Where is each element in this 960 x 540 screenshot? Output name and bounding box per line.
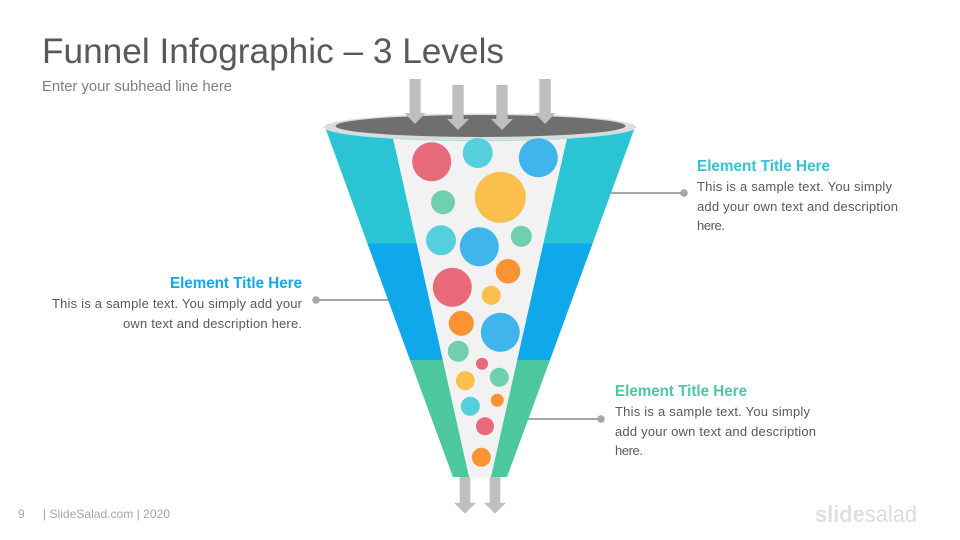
connector: bottom right bbox=[527, 415, 605, 423]
text block: top right bbox=[697, 158, 898, 233]
description: This is a sample text. You simply bbox=[697, 179, 892, 194]
funnel opening bbox=[336, 115, 626, 137]
text block: bottom right bbox=[615, 383, 816, 458]
element title: Element Title Here bbox=[615, 383, 747, 400]
description: This is a sample text. You simply bbox=[615, 404, 810, 419]
logo: slidesalad bbox=[815, 501, 917, 527]
funnel band: bottom green bbox=[410, 360, 550, 477]
arrow left bbox=[454, 477, 476, 514]
element title: Element Title Here bbox=[697, 158, 830, 175]
funnel bbox=[324, 114, 636, 477]
page number: 9 bbox=[18, 507, 25, 521]
description: This is a sample text. You simply add your bbox=[52, 296, 303, 311]
title: Funnel Infographic – 3 Levels bbox=[42, 32, 504, 71]
funnel band: middle blue bbox=[367, 244, 593, 360]
funnel rim edge bbox=[324, 114, 636, 141]
description: own text and description here. bbox=[123, 316, 302, 331]
funnel inner channel bbox=[390, 127, 570, 477]
funnel rim bbox=[324, 114, 636, 140]
arrow 1 bbox=[404, 79, 426, 124]
funnel band: top teal bbox=[325, 127, 635, 244]
output arrows bbox=[454, 477, 506, 514]
description bbox=[697, 179, 898, 233]
input arrows bbox=[404, 79, 556, 130]
arrow 4 bbox=[534, 79, 556, 124]
description bbox=[615, 404, 816, 458]
description: add your own text and description bbox=[615, 424, 816, 439]
bubbles bbox=[412, 138, 558, 467]
element title: Element Title Here bbox=[170, 275, 302, 292]
description: add your own text and description bbox=[697, 199, 898, 214]
arrow 3 bbox=[491, 85, 513, 130]
connector: middle left bbox=[312, 296, 389, 304]
description: here. bbox=[697, 218, 725, 233]
subhead: Enter your subhead line here bbox=[42, 79, 232, 95]
footer text: | SlideSalad.com | 2020 bbox=[43, 507, 170, 521]
arrow 2 bbox=[447, 85, 469, 130]
description bbox=[52, 296, 303, 331]
arrow right bbox=[484, 477, 506, 514]
connector: top right bbox=[611, 189, 688, 197]
description: here. bbox=[615, 443, 643, 458]
text block: middle left bbox=[52, 275, 303, 331]
